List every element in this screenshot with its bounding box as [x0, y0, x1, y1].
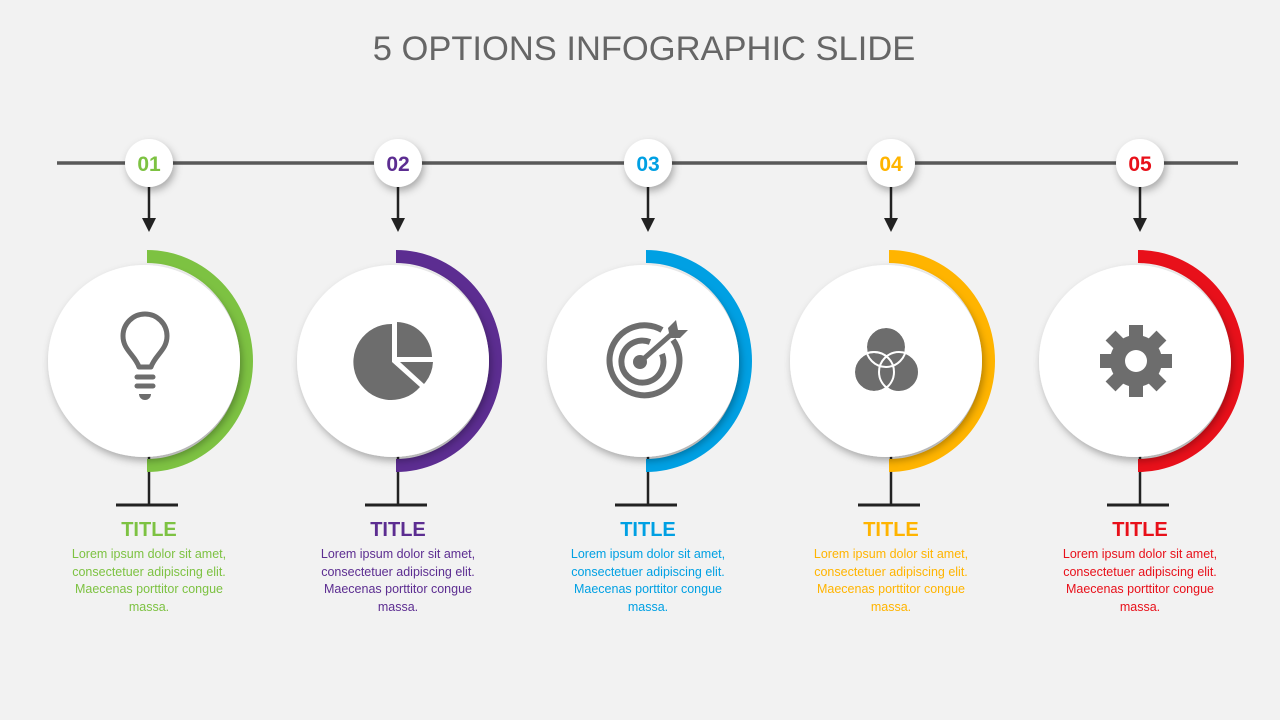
item 5: 05 — [1128, 153, 1152, 176]
item texts 1 — [72, 519, 226, 614]
text: Lorem ipsum dolor sit amet, consectetuer adipiscing elit. Maecenas porttitor congue massa. — [571, 547, 725, 614]
text: Lorem ipsum dolor sit amet, consectetuer adipiscing elit. Maecenas porttitor congue massa. — [1063, 547, 1217, 614]
item 1: 01 — [137, 153, 161, 176]
item 3: 03 — [636, 153, 660, 176]
item 2 — [297, 139, 502, 505]
icon: venn — [854, 327, 919, 392]
text: TITLE — [620, 519, 676, 541]
icon: pie chart — [353, 322, 433, 400]
text: Lorem ipsum dolor sit amet, consectetuer adipiscing elit. Maecenas porttitor congue massa. — [321, 547, 475, 614]
text: Lorem ipsum dolor sit amet, consectetuer adipiscing elit. Maecenas porttitor congue massa. — [814, 547, 968, 614]
item texts 4 — [814, 519, 968, 614]
item 2: 02 — [386, 153, 410, 176]
item texts 3 — [571, 519, 725, 614]
text: Lorem ipsum dolor sit amet, consectetuer adipiscing elit. Maecenas porttitor congue massa. — [72, 547, 226, 614]
text: TITLE — [370, 519, 426, 541]
text: TITLE — [1112, 519, 1168, 541]
item 3 — [547, 139, 752, 505]
icon: gear — [1085, 310, 1187, 412]
item 1 — [48, 139, 253, 505]
text: TITLE — [863, 519, 919, 541]
text: TITLE — [121, 519, 177, 541]
timeline — [57, 161, 1238, 165]
item texts 2 — [321, 519, 475, 614]
icon: bulb — [123, 314, 167, 386]
title: 5 OPTIONS INFOGRAPHIC SLIDE — [373, 30, 915, 68]
item texts 5 — [1063, 519, 1217, 614]
item 4: 04 — [879, 153, 903, 176]
icon: target — [609, 325, 679, 395]
item 4 — [790, 139, 995, 505]
item 5 — [1039, 139, 1244, 505]
